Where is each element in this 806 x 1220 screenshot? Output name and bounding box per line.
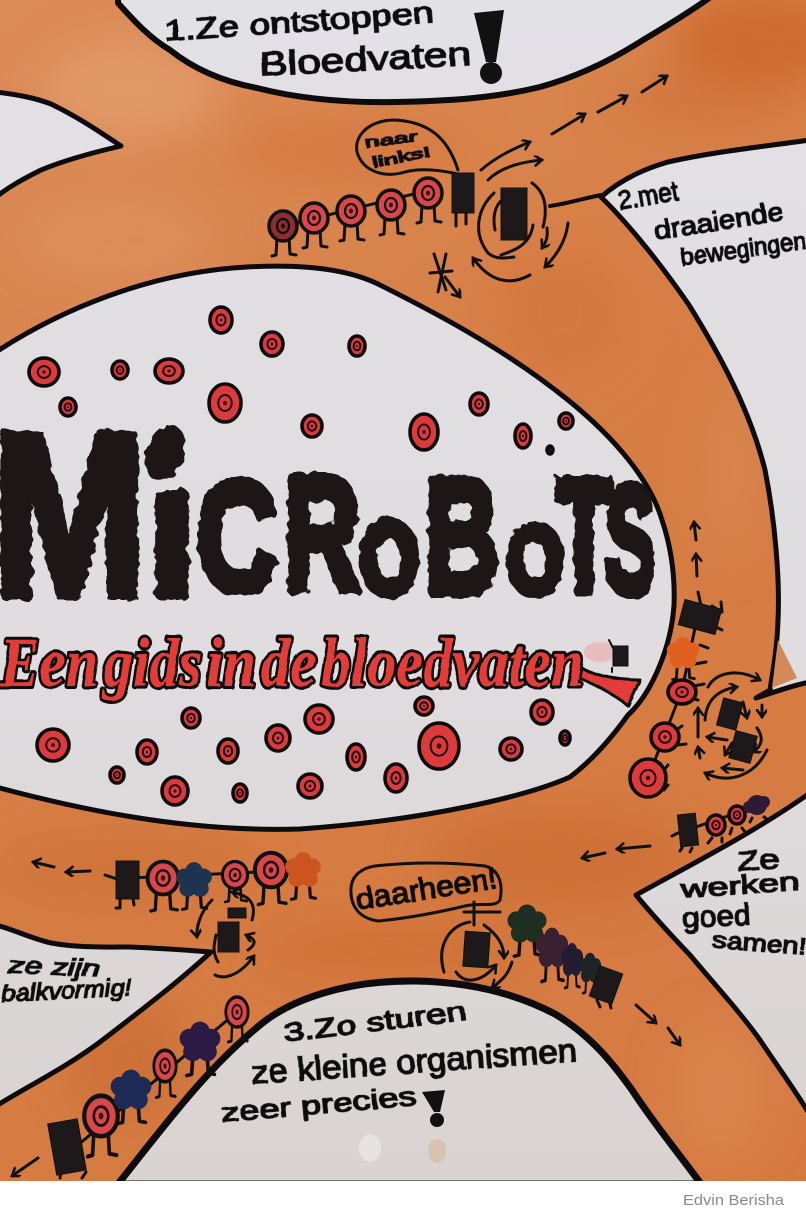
- note: ze zijn balkvormig: ze zijn: [6, 952, 101, 981]
- heading 3: Zo sturen ze kleine organismen zeer precies: ze kleine organismen: [250, 1031, 578, 1091]
- paper: central lumen: [0, 266, 674, 829]
- swirling robot top with arrows: [473, 142, 568, 281]
- small robot on subtitle: [584, 640, 628, 672]
- speech bubble: naar links: naar: [364, 128, 418, 152]
- note: ze zijn balkvormig: balkvormig!: [1, 974, 132, 1008]
- arrows: leftward top of lower band: [33, 862, 90, 872]
- heading 1: Ze ontstoppen bloedvaten: [163, 0, 504, 84]
- free blood cells, upper group: [29, 307, 573, 454]
- arrow: lower left: [12, 1158, 38, 1176]
- robot chain right vessel: [630, 592, 722, 797]
- paper: upper right opening: [601, 140, 806, 698]
- paper: bottom opening: [118, 981, 701, 1184]
- exclamation mark: [422, 1090, 445, 1127]
- note: ze zijn balkvormig: [1, 952, 132, 1008]
- orange patch at right junction: [772, 640, 797, 688]
- speech bubble: naar links: [357, 120, 458, 174]
- heading 1: Ze ontstoppen bloedvaten: 1.Ze ontstoppen: [163, 0, 435, 48]
- paper: left opening: [0, 92, 121, 197]
- arrows: upward in right vessel: [694, 522, 697, 576]
- title: MICROBOTS: [0, 386, 655, 645]
- robot chain left: [105, 852, 321, 911]
- title: MICROBOTS: R: [284, 444, 360, 625]
- swirling robot left: [197, 892, 254, 977]
- credit: Edvin Berisha: Edvin Berisha: [683, 1192, 785, 1209]
- heading 3: Zo sturen ze kleine organismen zeer precies: zeer precies: [220, 1081, 418, 1128]
- small robot chain lower right: [672, 795, 770, 852]
- speech bubble: daarheen: daarheen!: [354, 860, 499, 917]
- arrows: dashes to the top right: [552, 76, 667, 134]
- poster: S: [605, 455, 655, 625]
- free blood cells, lower group: [37, 697, 570, 805]
- exclamation mark: [474, 10, 504, 84]
- title: MICROBOTS: T: [556, 446, 612, 627]
- title: MICROBOTS: O: [507, 507, 563, 612]
- title: MICROBOTS: B: [425, 445, 499, 628]
- blocked direction mark: [430, 254, 460, 297]
- robot chain lower left: [48, 997, 248, 1178]
- paper: lower left opening: [0, 925, 211, 1106]
- note: Ze werken goed samen: [679, 843, 806, 961]
- speech bubble: naar links: links!: [371, 143, 432, 172]
- heading 2: met draaiende bewegingen: 2.met: [616, 175, 680, 216]
- title: MICROBOTS: O: [360, 503, 418, 615]
- note: Ze werken goed samen: samen!: [712, 927, 806, 961]
- heading 2: met draaiende bewegingen: draaiende: [652, 196, 785, 246]
- heading 3: Zo sturen ze kleine organismen zeer precies: [220, 996, 578, 1128]
- note: Ze werken goed samen: goed: [682, 898, 751, 935]
- robot chain top: [269, 173, 474, 256]
- paper: lower right opening: [636, 793, 806, 1115]
- heading 1: Ze ontstoppen bloedvaten: Bloedvaten: [258, 35, 472, 84]
- vessel stub line: [550, 195, 601, 206]
- arrows: leftward: [582, 846, 650, 858]
- title: MICROBOTS: C: [197, 450, 277, 624]
- heading 3: Zo sturen ze kleine organismen zeer precies: 3.Zo sturen: [282, 996, 468, 1048]
- two swirling robots right: [698, 673, 767, 778]
- white margin under the photo: [0, 1181, 806, 1220]
- note: Ze werken goed samen: werken: [679, 866, 800, 904]
- paint stains near the bottom: [359, 1134, 446, 1163]
- arrows: lower right: [636, 1005, 680, 1045]
- paper: top opening: [118, 0, 712, 102]
- robot chain centre right: [507, 904, 623, 1008]
- subtitle: Een gids in de bloedvaten: Een gids in de bloedvaten: [0, 625, 584, 702]
- title: MICROBOTS: I: [150, 463, 194, 626]
- note: Ze werken goed samen: Ze: [736, 843, 780, 877]
- heading 2: met draaiende bewegingen: [616, 175, 806, 272]
- swirling robot centre: [442, 922, 512, 988]
